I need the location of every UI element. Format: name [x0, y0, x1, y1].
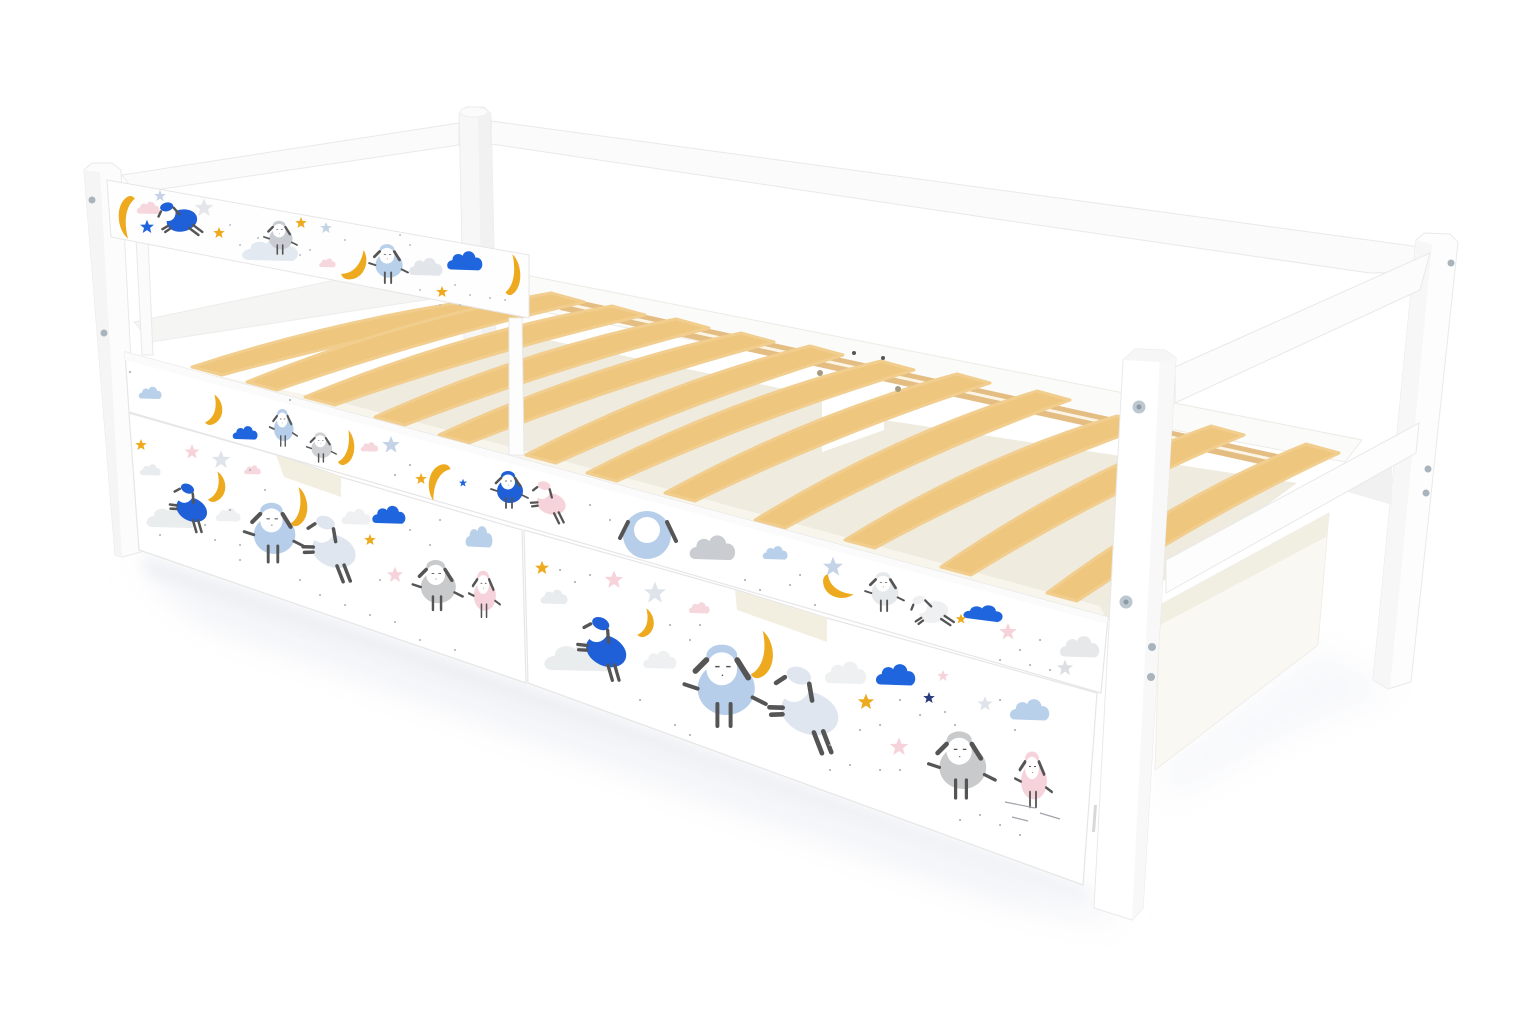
back long top rail — [491, 121, 1420, 273]
back lower rail — [500, 270, 1362, 462]
lower rail of head end — [134, 252, 470, 342]
wooden slats — [192, 293, 1339, 601]
front-right post — [1094, 349, 1176, 920]
guard print: sheep — [156, 196, 408, 283]
rail print: moons — [203, 394, 857, 601]
rail print: sheep — [270, 409, 954, 634]
guard print: clouds — [137, 202, 482, 276]
back-left post — [459, 107, 496, 338]
left drawer handle cut-out — [276, 455, 341, 497]
floor shadow — [130, 555, 1400, 925]
guard panel with print — [107, 180, 529, 318]
back-right post — [1373, 233, 1458, 689]
right drawer print: clouds, moons and stars — [535, 561, 1049, 755]
right drawer front with print — [524, 530, 1097, 885]
front-left post — [84, 163, 141, 557]
screws on front-right post — [1120, 400, 1156, 681]
top rail of head end — [122, 123, 459, 193]
left drawer print: clouds, moons and stars — [135, 439, 492, 582]
guard print: moons — [116, 195, 522, 296]
rail print: clouds — [139, 387, 1099, 657]
left drawer print: sheep — [146, 480, 500, 617]
cream fabric under slats — [125, 330, 1297, 620]
right drawer print: sheep — [544, 612, 1052, 807]
right drawer box side — [1155, 513, 1329, 770]
right end lower rail — [1166, 423, 1419, 593]
right drawer handle cut-out — [735, 590, 827, 642]
guard print: stars — [140, 190, 448, 297]
right end top rail — [1175, 253, 1430, 403]
slat fixing screws — [817, 351, 901, 392]
slat support strip — [560, 296, 1300, 473]
rail print: stars — [382, 436, 1073, 675]
left drawer front with print — [129, 413, 526, 683]
cross piece behind right leg — [1345, 460, 1392, 505]
guard support bars — [136, 238, 524, 455]
front long rail with print — [125, 352, 1108, 693]
